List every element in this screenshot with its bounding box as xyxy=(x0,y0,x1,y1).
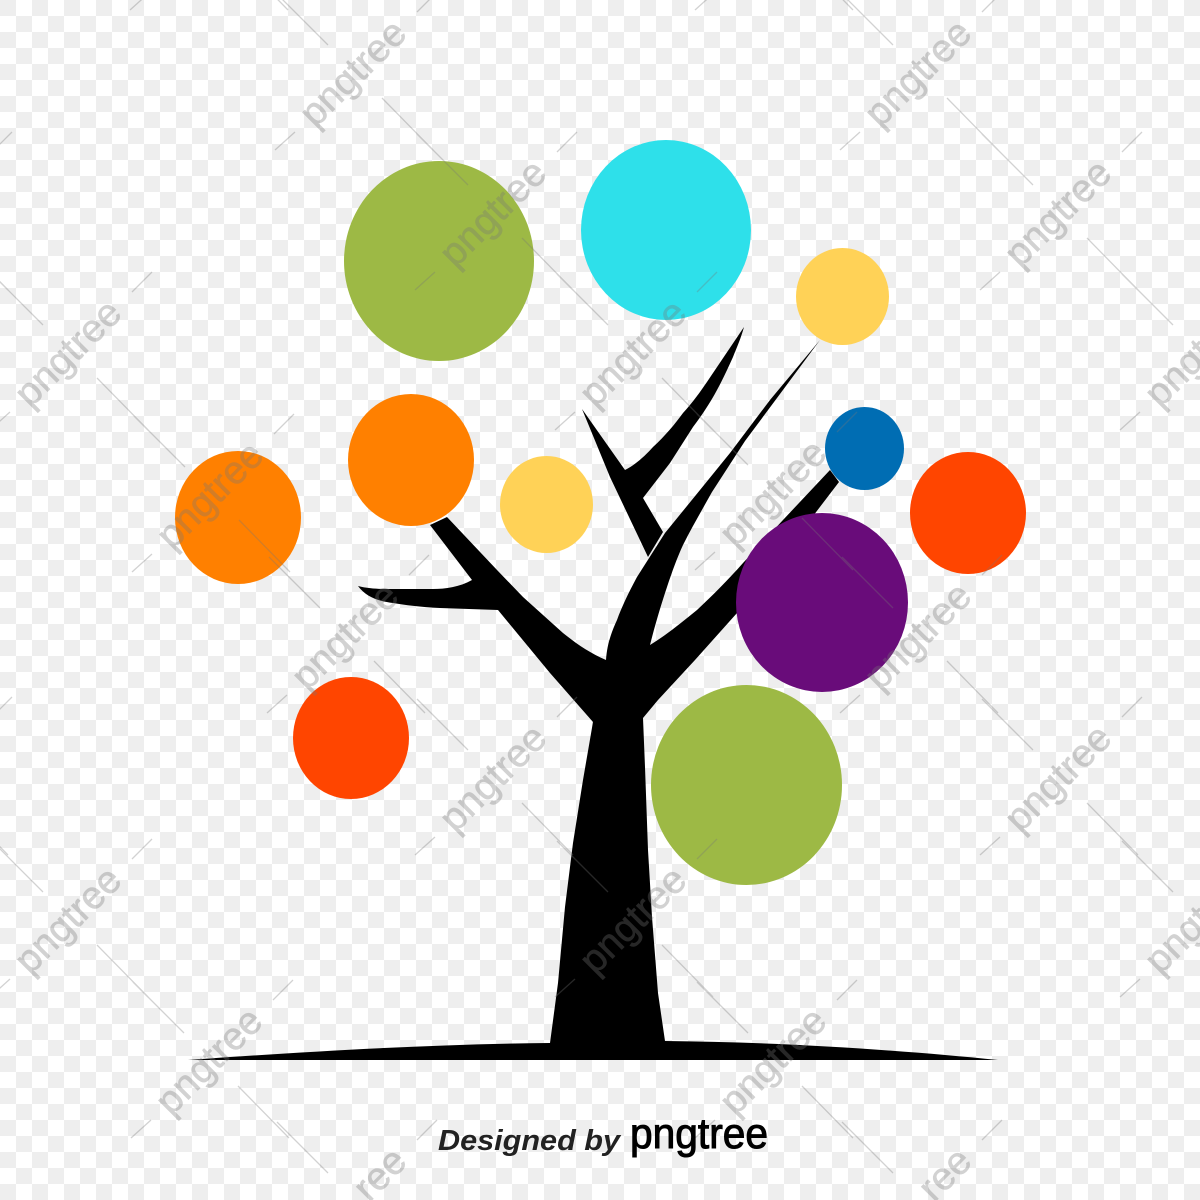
watermark layer: pngtree xyxy=(148,433,272,557)
watermark layer: pngtree xyxy=(711,431,835,555)
watermark layer: pngtree xyxy=(996,716,1120,840)
circle: purple xyxy=(736,513,908,692)
circle: large green lower right xyxy=(651,685,842,885)
circle: blue xyxy=(825,407,904,490)
tree: upper forked branch xyxy=(582,327,744,557)
watermark layer: pngtree xyxy=(571,291,695,415)
watermark layer: pngtree xyxy=(431,151,555,275)
circle: orange far left xyxy=(175,451,301,584)
circle: large green top left xyxy=(344,161,534,361)
watermark layer: pngtree xyxy=(856,11,980,135)
circle: yellow top right xyxy=(796,248,889,345)
watermark layer: pngtree xyxy=(856,574,980,698)
watermark layer: pngtree xyxy=(996,151,1120,275)
watermark layer: pngtree xyxy=(291,11,415,135)
watermark layer: pngtree xyxy=(283,574,407,698)
circle: yellow middle xyxy=(500,456,593,553)
watermark layer: pngtree xyxy=(571,858,695,982)
circle: red right xyxy=(910,452,1026,574)
circle: red left xyxy=(293,677,409,799)
tree: trunk and main branches xyxy=(358,340,839,1060)
ground line xyxy=(188,1041,998,1060)
watermark layer: pngtree xyxy=(6,291,130,415)
watermark layer: pngtree xyxy=(711,999,835,1123)
credit: designed by: Designed by xyxy=(438,1125,622,1157)
credit: pngtree logo: pngtree xyxy=(630,1110,768,1158)
circle: orange on branch xyxy=(348,394,474,526)
watermark layer: pngtree xyxy=(6,858,130,982)
circle: cyan top xyxy=(581,140,751,320)
watermark layer: pngtree xyxy=(147,999,271,1123)
watermark layer: pngtree xyxy=(431,716,555,840)
